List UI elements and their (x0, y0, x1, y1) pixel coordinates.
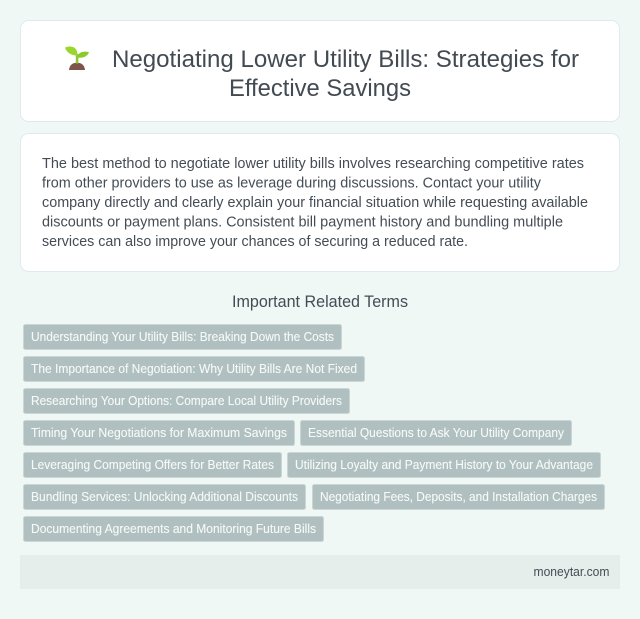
tag 10 (24, 516, 324, 542)
tag list (24, 324, 604, 542)
tag 8 (24, 484, 306, 510)
tag 10: Documenting Agreements and Monitoring Future Bills (31, 521, 316, 536)
summary text (42, 156, 588, 250)
tag 5 (300, 420, 572, 446)
tag 8: Bundling Services: Unlocking Additional Discounts (31, 489, 298, 504)
footer bar (20, 555, 620, 589)
summary text: services can also improve your chances of securing a reduced rate. (42, 234, 468, 250)
tag 7 (288, 452, 600, 478)
tag 6 (24, 452, 282, 478)
title text (112, 46, 579, 102)
title text: Negotiating Lower Utility Bills: Strategies for (112, 46, 579, 73)
tag 3 (24, 388, 350, 414)
tag 2: The Importance of Negotiation: Why Utility Bills Are Not Fixed (31, 361, 357, 376)
summary text: discounts or payment plans. Consistent bill payment history and bundling multiple (42, 214, 563, 230)
tag 3: Researching Your Options: Compare Local Utility Providers (31, 393, 342, 408)
tag 5: Essential Questions to Ask Your Utility Company (308, 425, 565, 440)
tag 7: Utilizing Loyalty and Payment History to Your Advantage (295, 457, 593, 472)
panel: summary (20, 134, 620, 272)
tag 4: Timing Your Negotiations for Maximum Savings (31, 425, 287, 440)
tag 9 (312, 484, 604, 510)
footer text: moneytar.com (534, 565, 610, 579)
tag 6: Leveraging Competing Offers for Better Rates (31, 457, 274, 472)
icon: seedling (65, 46, 89, 70)
tag 1: Understanding Your Utility Bills: Breaking Down the Costs (31, 329, 334, 344)
title panel (20, 20, 620, 122)
summary text: company directly and clearly explain your financial situation while requesting available (42, 195, 588, 211)
tag 9: Negotiating Fees, Deposits, and Installation Charges (320, 489, 597, 504)
summary text: The best method to negotiate lower utility bills involves researching competitive rates (42, 156, 584, 172)
tag 1 (24, 324, 342, 350)
tag 4 (24, 420, 294, 446)
summary text: from other providers to use as leverage during discussions. Contact your utility (42, 176, 542, 192)
heading: important related terms: Important Related Terms (232, 293, 408, 311)
tag 2 (24, 356, 364, 382)
title text: Effective Savings (229, 75, 411, 102)
